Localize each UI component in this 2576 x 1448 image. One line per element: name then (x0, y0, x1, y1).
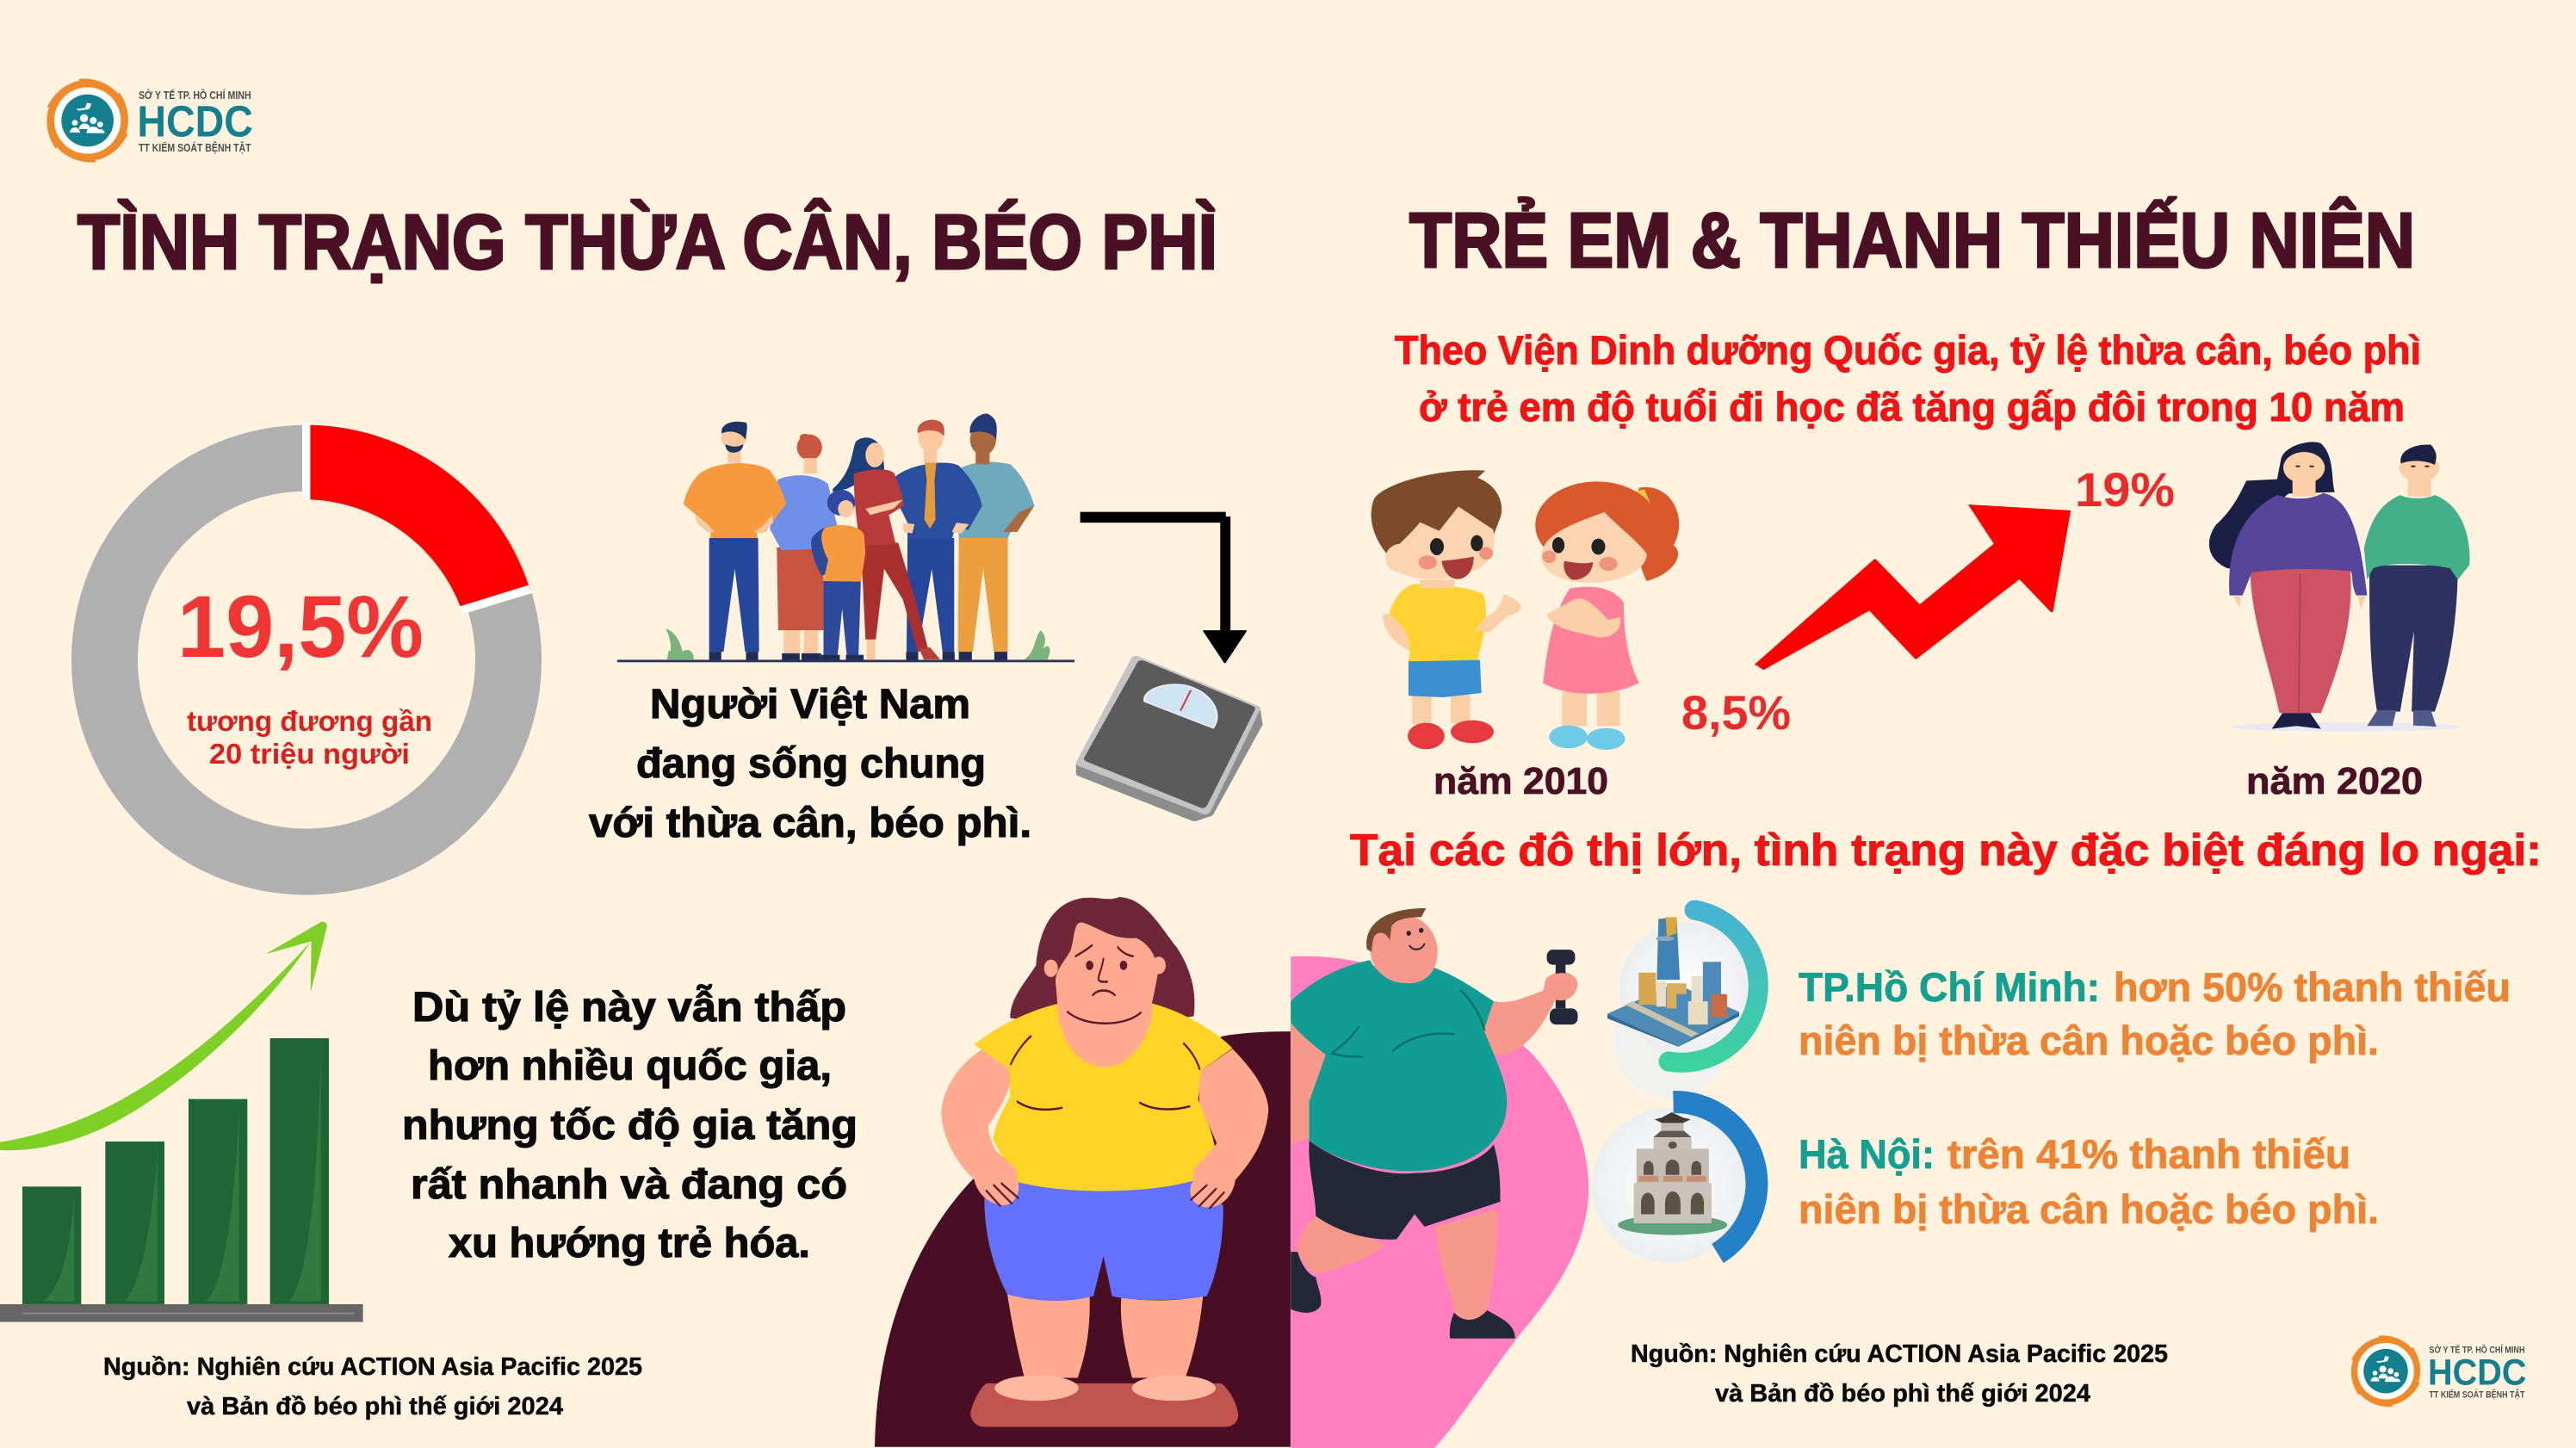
source: right (1631, 1340, 2168, 1408)
logo: HCDC top left: HCDC (137, 96, 253, 145)
text: Hanoi: Hà Nội: (1799, 1131, 1935, 1177)
text: growth trend: Dù tỷ lệ này vẫn thấp (412, 984, 846, 1030)
label: 2010: năm 2010 (1434, 760, 1608, 802)
text: growth trend (402, 984, 858, 1266)
donut chart: 19.5% (105, 422, 532, 862)
label: 2020: năm 2020 (2246, 760, 2423, 802)
source: left: Nguồn: Nghiên cứu ACTION Asia Pacific 2025 (103, 1353, 642, 1381)
title: left: TÌNH TRẠNG THỪA CÂN, BÉO PHÌ (77, 198, 1217, 286)
text: growth trend: rất nhanh và đang có (411, 1162, 847, 1208)
donut caption: tương đương gần (187, 705, 432, 737)
value: 8,5%: 8,5% (1681, 685, 1791, 739)
illustration: Hanoi circle (1592, 1102, 1756, 1263)
source: left (103, 1353, 642, 1420)
text: Vietnamese living with obesity (589, 682, 1031, 846)
illustration: group of people (617, 413, 1074, 662)
subtitle: doubled in 10 years: Theo Viện Dinh dưỡng Quốc gia, tỷ lệ thừa cân, béo phì (1395, 327, 2421, 373)
donut value: 19,5% (177, 578, 424, 676)
subtitle: doubled in 10 years: ở trẻ em độ tuổi đi học đã tăng gấp đôi trong 10 năm (1419, 384, 2405, 430)
illustration: Ho Chi Minh City circle (1607, 910, 1758, 1099)
text: Vietnamese living with obesity: Người Việt Nam (650, 682, 970, 727)
text: Vietnamese living with obesity: với thừa cân, béo phì. (589, 801, 1031, 846)
text: growth trend: nhưng tốc độ gia tăng (402, 1103, 858, 1148)
arrow: to scale (1081, 512, 1246, 663)
illustration: running man with dumbbell (1291, 908, 1588, 1448)
logo: HCDC top left: TT KIỂM SOÁT BỆNH TẬT (139, 141, 251, 154)
title: right: TRẺ EM & THANH THIẾU NIÊN (1409, 196, 2415, 284)
value: 19%: 19% (2075, 462, 2175, 517)
logo: HCDC bottom right: TT KIỂM SOÁT BỆNH TẬT (2429, 1389, 2525, 1400)
illustration: worried woman on scale (875, 897, 1291, 1447)
source: left: và Bản đồ béo phì thế giới 2024 (187, 1393, 563, 1420)
donut caption: 20 triệu người (209, 738, 410, 770)
text: Vietnamese living with obesity: đang sống chung (636, 741, 986, 787)
logo: HCDC bottom right: HCDC (2428, 1352, 2526, 1393)
icon: weighing scale (1081, 659, 1258, 818)
illustration: teenagers 2020 (2209, 442, 2469, 732)
logo: HCDC bottom right: SỞ Y TẾ TP. HỒ CHÍ MINH (2429, 1344, 2525, 1355)
text: Ho Chi Minh City: niên bị thừa cân hoặc béo phì. (1799, 1018, 2379, 1063)
source: right: Nguồn: Nghiên cứu ACTION Asia Pacific 2025 (1631, 1340, 2168, 1368)
text: Ho Chi Minh City: hơn 50% thanh thiếu (2114, 964, 2511, 1010)
text: growth trend: hơn nhiều quốc gia, (428, 1043, 832, 1089)
donut caption (187, 705, 432, 770)
illustration: children 2010 (1372, 470, 1679, 750)
source: right: và Bản đồ béo phì thế giới 2024 (1715, 1380, 2090, 1408)
text: growth trend: xu hướng trẻ hóa. (449, 1221, 810, 1266)
text: Hanoi (1799, 1131, 2379, 1232)
text: Ho Chi Minh City: TP.Hồ Chí Minh: (1799, 964, 2100, 1010)
logo: HCDC top left: SỞ Y TẾ TP. HỒ CHÍ MINH (139, 89, 251, 102)
subtitle: doubled in 10 years (1395, 327, 2421, 430)
text: Hanoi: niên bị thừa cân hoặc béo phì. (1799, 1186, 2379, 1232)
arrow: red growth (1756, 505, 2070, 669)
bar chart with rising arrow (0, 922, 363, 1322)
text: Hanoi: trên 41% thanh thiếu (1947, 1131, 2350, 1177)
logo: HCDC bottom right (2339, 1326, 2526, 1416)
text: Ho Chi Minh City (1799, 964, 2511, 1063)
logo: HCDC top left (33, 67, 253, 174)
heading: big cities: Tại các đô thị lớn, tình trạng này đặc biệt đáng lo ngại: (1350, 826, 2542, 876)
